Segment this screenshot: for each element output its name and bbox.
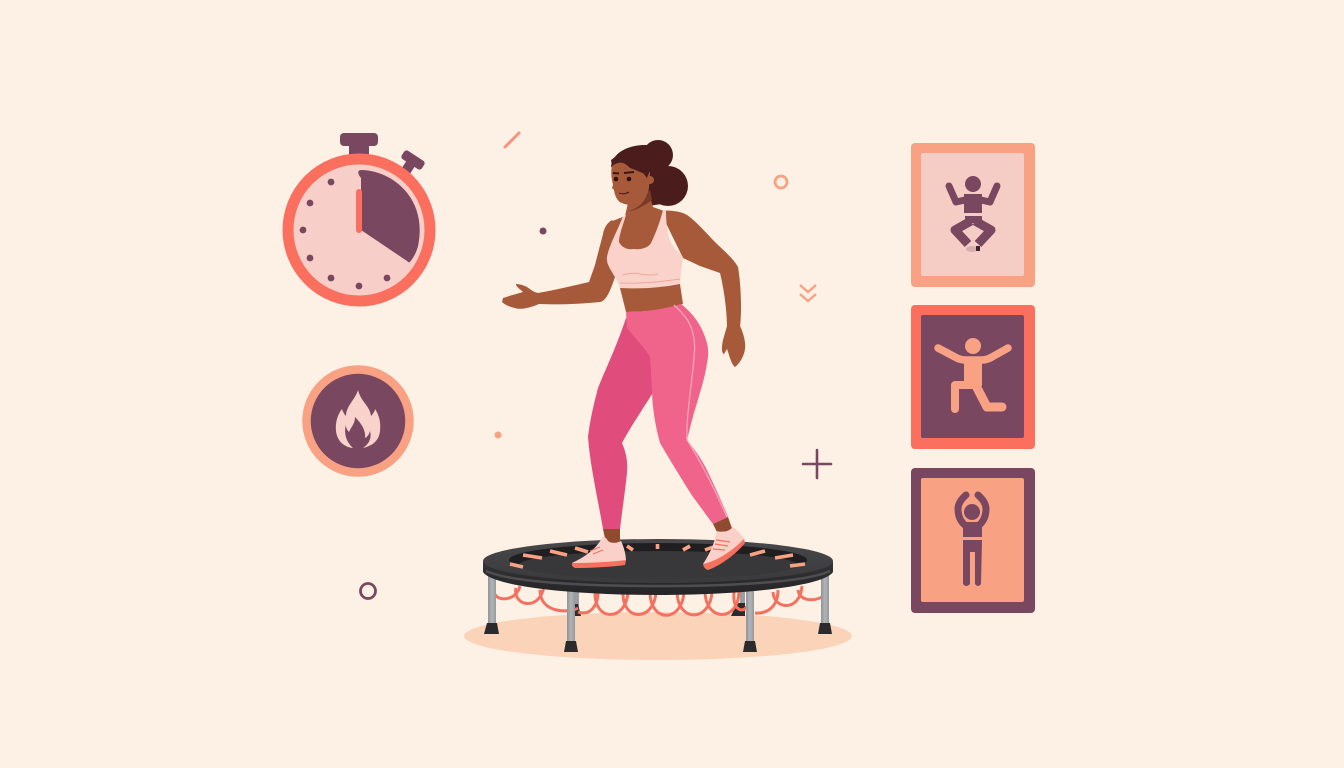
front legs and feet — [484, 572, 832, 652]
midriff — [620, 284, 683, 312]
person — [502, 140, 745, 570]
icon: flame badge — [306, 370, 410, 472]
leg seam — [674, 305, 727, 517]
right arm — [660, 211, 741, 327]
face details — [613, 172, 634, 194]
panel: lunge pose card — [911, 305, 1035, 449]
left shoe — [572, 537, 626, 568]
panel: jump pose card — [911, 143, 1035, 287]
icon: squat jump figure — [949, 176, 997, 252]
right shoe — [703, 527, 745, 570]
floor shadow — [464, 612, 852, 660]
ankles — [603, 517, 733, 543]
back legs — [573, 590, 745, 616]
face — [611, 158, 650, 205]
hair back — [611, 140, 688, 206]
front leg — [626, 304, 728, 524]
icon: stopwatch — [288, 133, 430, 301]
neck and chest — [610, 190, 668, 252]
springs — [495, 586, 822, 615]
icon: lunge figure — [938, 338, 1008, 409]
panel: overhead reach card — [911, 468, 1035, 613]
trampoline — [483, 539, 833, 652]
sports bra — [607, 210, 683, 288]
icon: arms overhead figure — [958, 495, 986, 586]
rim — [483, 562, 833, 595]
left arm and hand — [502, 220, 628, 309]
right hand — [722, 326, 745, 367]
mat straps — [510, 544, 805, 567]
mat — [509, 543, 807, 577]
back leg — [588, 318, 654, 529]
decorative accents — [360, 133, 831, 598]
